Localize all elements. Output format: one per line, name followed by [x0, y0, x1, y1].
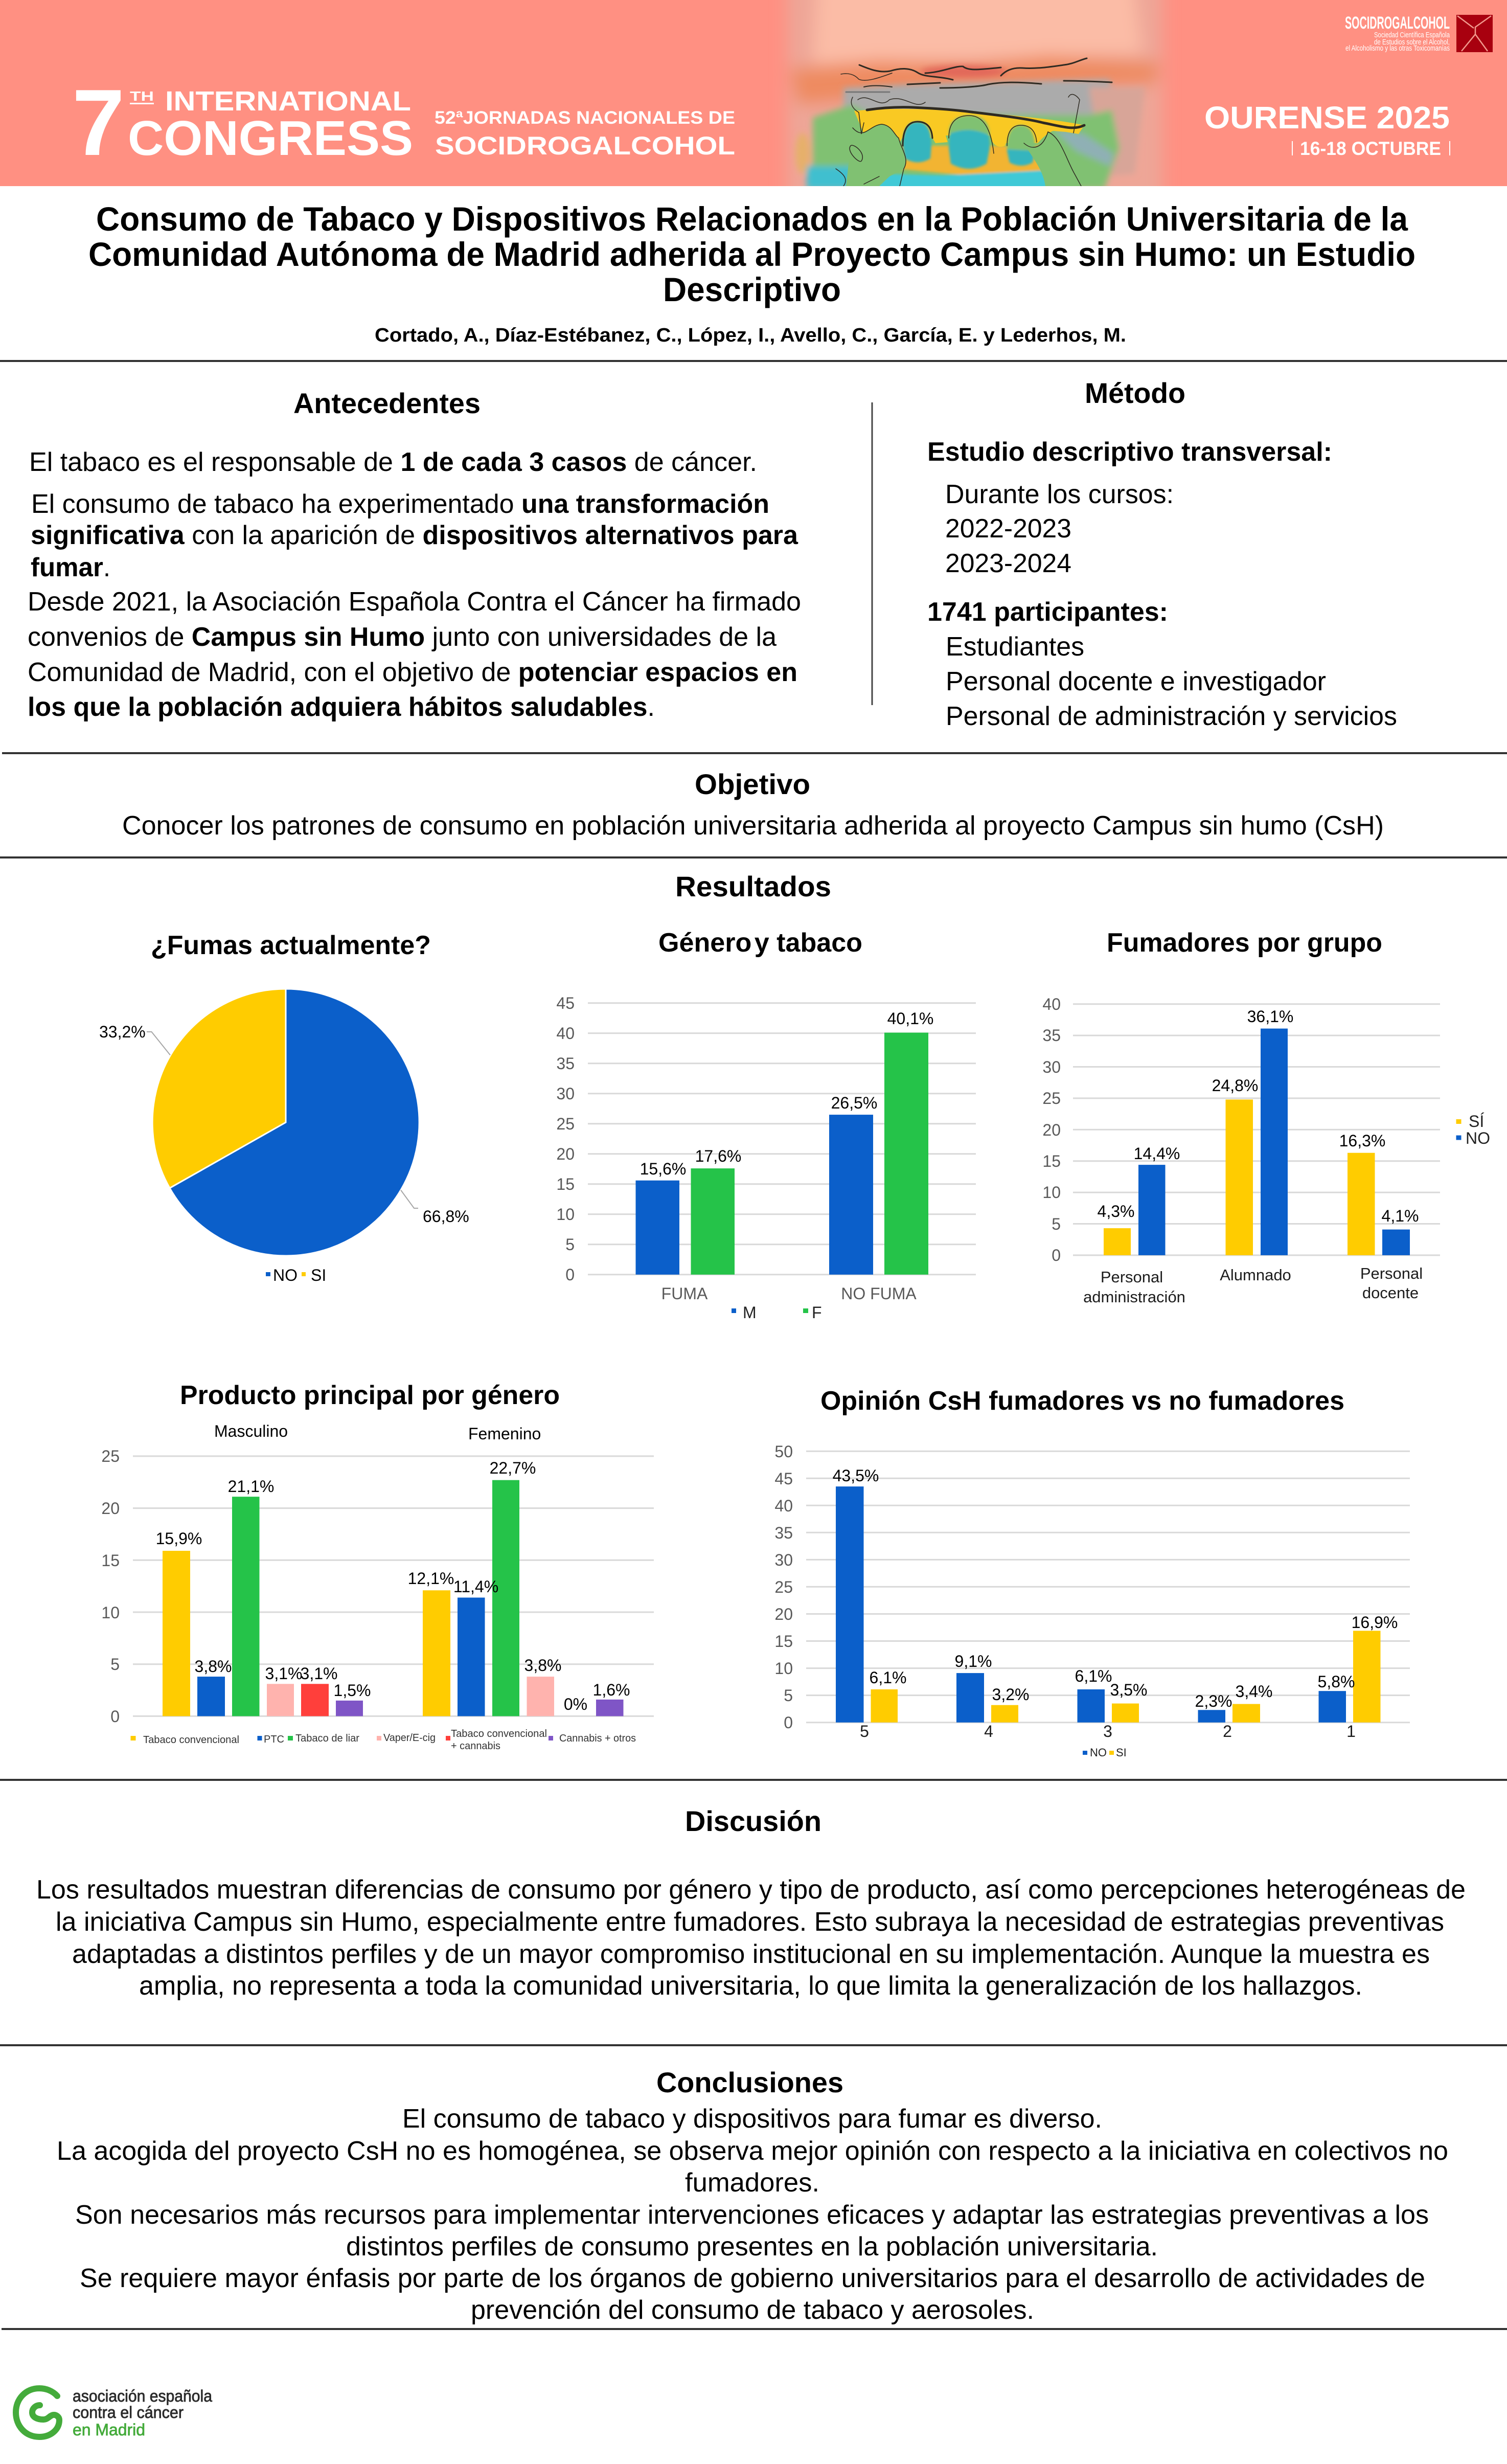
chart: fumadores por grupo: 5: [1052, 1215, 1061, 1233]
title: Consumo de Tabaco y Dispositivos Relacionados en la Población Universitaria de la: [96, 200, 1408, 238]
chart: fumadores por grupo: 4,1%: [1382, 1207, 1419, 1225]
panel: discusión: Los resultados muestran diferencias de consumo por género y tipo de producto, así como percepciones heterogéneas de: [36, 1875, 1466, 1905]
panel: conclusiones: prevención del consumo de tabaco y aerosoles.: [471, 2295, 1034, 2325]
panel: objetivo: [122, 768, 1384, 841]
chart: producto principal por género: 22,7%: [490, 1459, 536, 1477]
chart: fumadores por grupo: SÍ: [1469, 1112, 1484, 1131]
chart: opinión CsH fumadores vs no fumadores: [774, 1386, 1410, 1759]
text block: participantes: Personal de administración y servicios: [946, 702, 1397, 731]
chart: fumadores por grupo: Personal: [1101, 1268, 1163, 1286]
chart: producto principal por género: 25: [101, 1447, 120, 1465]
panel: conclusiones: fumadores.: [685, 2168, 819, 2198]
title: Comunidad Autónoma de Madrid adherida al Proyecto Campus sin Humo: un Estudio: [88, 235, 1415, 273]
chart: opinión CsH fumadores vs no fumadores: 3,4%: [1236, 1682, 1272, 1701]
legend: products: Tabaco convencional: [143, 1734, 239, 1746]
text block: antecedentes body: Desde 2021, la Asociación Española Contra el Cáncer ha firmado: [28, 587, 801, 617]
title: [88, 200, 1415, 308]
chart: género y tabaco: 15: [556, 1175, 575, 1193]
congress name: INTERNATIONAL: [165, 86, 411, 117]
chart: opinión CsH fumadores vs no fumadores: 4: [984, 1722, 993, 1740]
text block: antecedentes body: significativa con la aparición de dispositivos alternativos para: [31, 521, 798, 550]
panel: conclusiones: Conclusiones: [656, 2066, 843, 2098]
panel: discusión: adaptadas a distintos perfiles y de un mayor compromiso institucional en su implementación. Aunque la muestra es: [72, 1939, 1430, 1969]
legend: products: Tabaco convencional: [451, 1728, 547, 1739]
text block: estudio: Durante los cursos:: [945, 480, 1174, 509]
chart: producto principal por género: 3,8%: [195, 1657, 232, 1676]
text block: estudio: [927, 437, 1332, 578]
location and dates: 16-18 OCTUBRE: [1300, 138, 1441, 159]
chart: género y tabaco: 5: [565, 1235, 575, 1254]
chart: opinión CsH fumadores vs no fumadores: 35: [774, 1524, 793, 1542]
text block: participantes: 1741 participantes:: [927, 597, 1168, 627]
chart: producto principal por género: 3,1%: [301, 1664, 337, 1683]
chart: género y tabaco: 35: [556, 1054, 575, 1073]
chart: género y tabaco: 26,5%: [831, 1094, 877, 1112]
chart: opinión CsH fumadores vs no fumadores: 6,1%: [870, 1668, 906, 1687]
chart: género y tabaco: Género y tabaco: [658, 928, 862, 958]
panel: conclusiones: Son necesarios más recursos para implementar intervenciones eficaces y adaptar las estrategias preventivas a los: [75, 2200, 1429, 2230]
chart: género y tabaco: M: [743, 1303, 757, 1322]
heading: antecedentes: Antecedentes: [293, 387, 481, 419]
chart: opinión CsH fumadores vs no fumadores: 5: [860, 1722, 869, 1740]
header banner: [0, 0, 1507, 205]
chart: producto principal por género: [101, 1381, 654, 1752]
chart: opinión CsH fumadores vs no fumadores: 15: [774, 1632, 793, 1651]
legend: products: PTC: [264, 1734, 284, 1745]
authors: Cortado, A., Díaz-Estébanez, C., López, I., Avello, C., García, E. y Lederhos, M.: [375, 325, 1126, 346]
text block: antecedentes body: El consumo de tabaco ha experimentado una transformación: [31, 489, 769, 519]
chart: fumadores por grupo: administración: [1083, 1288, 1185, 1306]
chart: opinión CsH fumadores vs no fumadores: 2: [1223, 1722, 1232, 1740]
chart: género y tabaco: 30: [556, 1084, 575, 1103]
logo: asociación española contra el cáncer en Madrid: en Madrid: [73, 2421, 145, 2439]
chart: fumadores por grupo: [1042, 928, 1490, 1306]
chart: fumadores por grupo: 10: [1042, 1183, 1061, 1202]
congress name: [72, 70, 413, 175]
chart: opinión CsH fumadores vs no fumadores: 3: [1103, 1722, 1112, 1740]
congress name: 7: [72, 70, 125, 175]
chart: opinión CsH fumadores vs no fumadores: 6,1%: [1075, 1667, 1112, 1685]
legend: products: Tabaco de liar: [295, 1733, 359, 1744]
chart: género y tabaco: 15,6%: [640, 1160, 686, 1178]
chart: fumadores por grupo: 16,3%: [1339, 1132, 1385, 1150]
chart: género y tabaco: FUMA: [661, 1284, 708, 1303]
panel: objetivo: Objetivo: [695, 768, 810, 800]
chart: producto principal por género: 20: [101, 1499, 120, 1518]
society logo: Sociedad Científica Española: [1374, 31, 1450, 39]
chart: ¿Fumas actualmente? pie: SI: [311, 1266, 326, 1284]
logo: asociación española contra el cáncer en Madrid: contra el cáncer: [73, 2403, 184, 2422]
heading: resultados: Resultados: [675, 870, 831, 902]
chart: opinión CsH fumadores vs no fumadores: SI: [1116, 1746, 1127, 1759]
chart: opinión CsH fumadores vs no fumadores: Opinión CsH fumadores vs no fumadores: [820, 1386, 1344, 1416]
legend: products: + cannabis: [451, 1740, 500, 1752]
chart: producto principal por género: 12,1%: [408, 1569, 454, 1588]
chart: producto principal por género: 1,5%: [334, 1681, 371, 1700]
logo: asociación española contra el cáncer en Madrid: [16, 2387, 212, 2439]
chart: fumadores por grupo: 15: [1042, 1152, 1061, 1170]
chart: fumadores por grupo: Personal: [1360, 1264, 1423, 1282]
text block: estudio: 2023-2024: [945, 549, 1071, 578]
chart: opinión CsH fumadores vs no fumadores: 10: [774, 1659, 793, 1678]
text block: participantes: Estudiantes: [946, 632, 1084, 662]
panel: conclusiones: [57, 2066, 1448, 2325]
chart: fumadores por grupo: 30: [1042, 1058, 1061, 1076]
jornadas text: 52ªJORNADAS NACIONALES DE: [435, 108, 735, 128]
text block: antecedentes body: El tabaco es el responsable de 1 de cada 3 casos de cáncer.: [29, 447, 757, 477]
chart: ¿Fumas actualmente? pie: NO: [273, 1266, 298, 1284]
panel: discusión: [36, 1805, 1466, 2001]
chart: producto principal por género: 15,9%: [156, 1529, 202, 1548]
chart: género y tabaco: 10: [556, 1205, 575, 1224]
society logo: el Alcoholismo y las otras Toxicomanías: [1345, 44, 1450, 53]
text block: participantes: Personal docente e investigador: [946, 667, 1326, 696]
text block: participantes: [927, 597, 1397, 731]
chart: producto principal por género: 3,8%: [524, 1656, 561, 1675]
chart: opinión CsH fumadores vs no fumadores: 1: [1346, 1722, 1356, 1740]
chart: producto principal por género: 5: [110, 1655, 120, 1674]
chart: opinión CsH fumadores vs no fumadores: 5: [784, 1686, 793, 1705]
chart: fumadores por grupo: NO: [1466, 1129, 1490, 1147]
chart: género y tabaco: F: [812, 1303, 822, 1322]
panel: conclusiones: distintos perfiles de consumo presentes en la población universitaria.: [346, 2232, 1158, 2262]
chart: opinión CsH fumadores vs no fumadores: 3,5%: [1110, 1681, 1147, 1699]
text block: antecedentes body: [28, 447, 801, 722]
panel: conclusiones: La acogida del proyecto CsH no es homogénea, se observa mejor opinión con respecto a la iniciativa en colectivos no: [57, 2136, 1448, 2166]
panel: conclusiones: Se requiere mayor énfasis por parte de los órganos de gobierno universitarios para el desarrollo de actividades de: [80, 2264, 1425, 2293]
chart: fumadores por grupo: 25: [1042, 1089, 1061, 1107]
chart: fumadores por grupo: 20: [1042, 1121, 1061, 1139]
chart: producto principal por género: 11,4%: [453, 1577, 498, 1596]
chart: opinión CsH fumadores vs no fumadores: 5,8%: [1318, 1672, 1355, 1691]
legend: products: Cannabis + otros: [559, 1733, 636, 1744]
chart: opinión CsH fumadores vs no fumadores: 0: [784, 1713, 793, 1732]
chart: opinión CsH fumadores vs no fumadores: 50: [774, 1442, 793, 1461]
chart: fumadores por grupo: 35: [1042, 1026, 1061, 1045]
chart: producto principal por género: 21,1%: [228, 1477, 274, 1496]
text block: estudio: Estudio descriptivo transversal:: [927, 437, 1332, 467]
panel: objetivo: Conocer los patrones de consumo en población universitaria adherida al proyecto Campus sin humo (CsH): [122, 811, 1384, 841]
chart: ¿Fumas actualmente? pie: 66,8%: [423, 1207, 469, 1226]
chart: producto principal por género: 0%: [564, 1695, 587, 1713]
chart: opinión CsH fumadores vs no fumadores: 43,5%: [833, 1466, 879, 1485]
chart: género y tabaco: 40,1%: [887, 1009, 933, 1028]
chart: producto principal por género: 10: [101, 1603, 120, 1622]
text block: antecedentes body: fumar.: [31, 553, 110, 582]
jornadas text: [435, 108, 735, 160]
chart: fumadores por grupo: 24,8%: [1212, 1076, 1258, 1095]
text block: antecedentes body: convenios de Campus sin Humo junto con universidades de la: [28, 622, 777, 652]
text block: antecedentes body: Comunidad de Madrid, con el objetivo de potenciar espacios en: [28, 658, 797, 687]
title: Descriptivo: [663, 270, 841, 308]
panel: método: [927, 377, 1397, 731]
chart: género y tabaco: 0: [565, 1265, 575, 1284]
chart: género y tabaco: 17,6%: [695, 1147, 741, 1165]
chart: opinión CsH fumadores vs no fumadores: NO: [1090, 1746, 1107, 1759]
chart: opinión CsH fumadores vs no fumadores: 20: [774, 1605, 793, 1623]
society logo: [1345, 13, 1493, 53]
text block: estudio: 2022-2023: [945, 514, 1071, 544]
chart: fumadores por grupo: Alumnado: [1220, 1266, 1291, 1284]
chart: fumadores por grupo: Fumadores por grupo: [1107, 928, 1382, 958]
chart: producto principal por género: 3,1%: [265, 1664, 302, 1683]
jornadas text: SOCIDROGALCOHOL: [435, 131, 735, 160]
congress name: TH: [130, 88, 154, 104]
chart: opinión CsH fumadores vs no fumadores: 9,1%: [955, 1652, 992, 1670]
banner painting: bridge: [787, 0, 1163, 205]
chart: fumadores por grupo: 14,4%: [1134, 1144, 1180, 1163]
chart: producto principal por género: 15: [101, 1551, 120, 1570]
legend: products: Vaper/E-cig: [383, 1732, 436, 1744]
panel: antecedentes: [28, 387, 801, 722]
chart: género y tabaco: [556, 928, 976, 1322]
chart: opinión CsH fumadores vs no fumadores: 3,2%: [992, 1685, 1029, 1704]
chart: fumadores por grupo: 4,3%: [1098, 1202, 1134, 1220]
panel: conclusiones: El consumo de tabaco y dispositivos para fumar es diverso.: [402, 2104, 1102, 2134]
heading: método: Método: [1085, 377, 1185, 409]
panel: discusión: la iniciativa Campus sin Humo, especialmente entre fumadores. Esto subraya la necesidad de estrategias preventivas: [56, 1907, 1444, 1937]
panel: discusión: Discusión: [685, 1805, 821, 1837]
panel: discusión: amplia, no representa a toda la comunidad universitaria, lo que limita la generalización de los hallazgos.: [139, 1971, 1362, 2001]
chart: fumadores por grupo: 0: [1052, 1246, 1061, 1264]
chart: género y tabaco: NO FUMA: [841, 1284, 917, 1303]
congress name: CONGRESS: [128, 111, 413, 166]
chart: género y tabaco: 25: [556, 1115, 575, 1133]
chart: género y tabaco: 45: [556, 994, 575, 1012]
chart: producto principal por género: Producto principal por género: [180, 1381, 560, 1410]
chart: opinión CsH fumadores vs no fumadores: 30: [774, 1551, 793, 1569]
chart: género y tabaco: 20: [556, 1145, 575, 1163]
chart: género y tabaco: 40: [556, 1024, 575, 1043]
location and dates: [1204, 100, 1450, 159]
chart: fumadores por grupo: 36,1%: [1247, 1007, 1293, 1026]
chart: ¿Fumas actualmente? pie: [99, 931, 469, 1284]
logo: asociación española contra el cáncer en Madrid: asociación española: [73, 2387, 212, 2405]
chart: opinión CsH fumadores vs no fumadores: 25: [774, 1578, 793, 1596]
chart: producto principal por género: 0: [110, 1707, 120, 1726]
chart: producto principal por género: Masculino: [214, 1422, 288, 1440]
chart: producto principal por género: 1,6%: [593, 1681, 630, 1699]
chart: ¿Fumas actualmente? pie: ¿Fumas actualmente?: [151, 931, 431, 960]
chart: ¿Fumas actualmente? pie: 33,2%: [99, 1023, 146, 1041]
chart: opinión CsH fumadores vs no fumadores: 40: [774, 1497, 793, 1515]
legend: products: [131, 1728, 636, 1752]
chart: opinión CsH fumadores vs no fumadores: 2,3%: [1195, 1692, 1232, 1710]
chart: fumadores por grupo: 40: [1042, 995, 1061, 1013]
society logo: de Estudios sobre el Alcohol,: [1374, 38, 1450, 47]
chart: opinión CsH fumadores vs no fumadores: 16,9%: [1352, 1613, 1398, 1632]
chart: producto principal por género: Femenino: [468, 1425, 541, 1443]
text block: antecedentes body: los que la población adquiera hábitos saludables.: [28, 692, 655, 722]
chart: fumadores por grupo: docente: [1362, 1284, 1419, 1302]
chart: opinión CsH fumadores vs no fumadores: 45: [774, 1470, 793, 1488]
location and dates: OURENSE 2025: [1204, 100, 1450, 135]
